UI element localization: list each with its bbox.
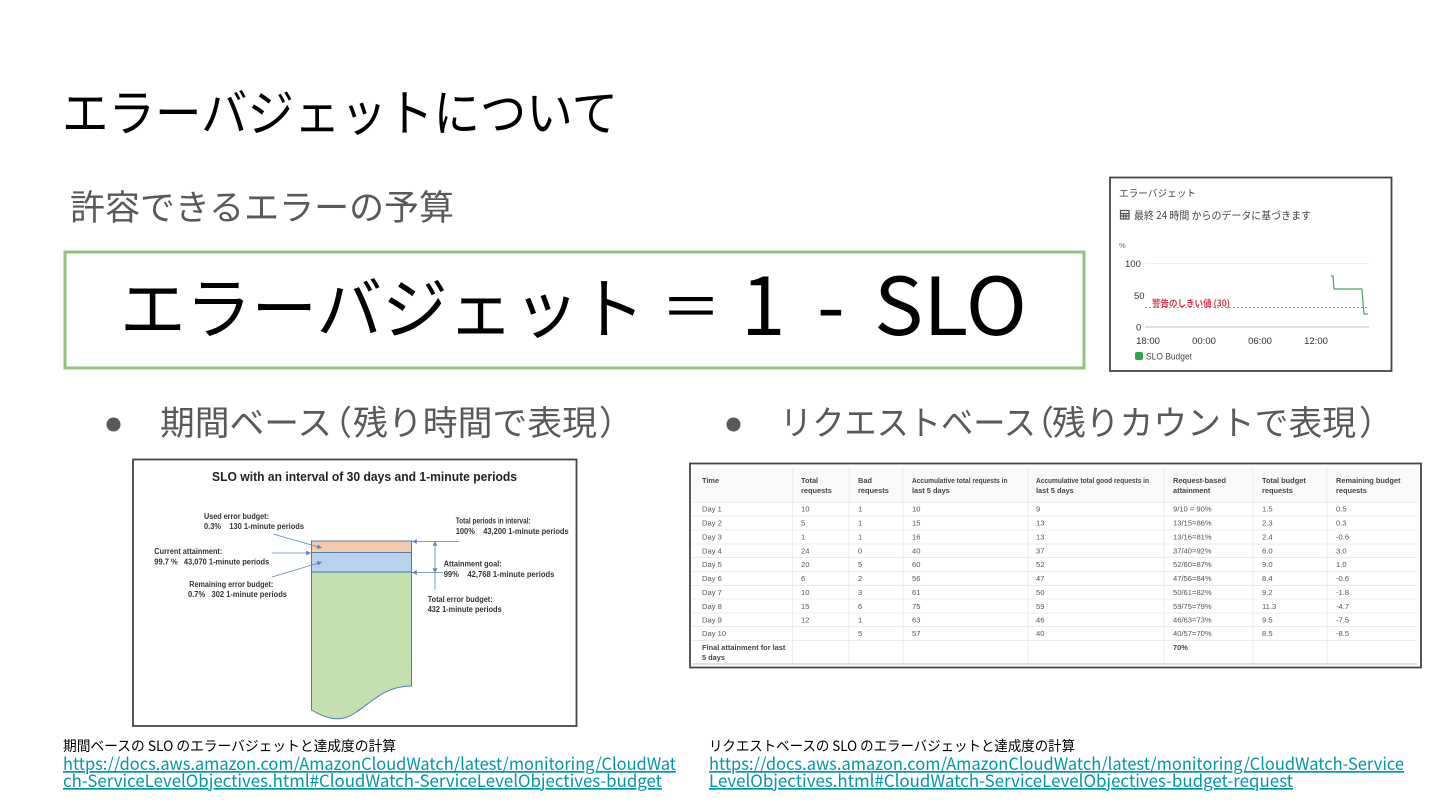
table rows: -0.6 <box>1336 574 1349 583</box>
table rows: Day 7 <box>702 588 722 597</box>
table rows: 75 <box>912 602 920 611</box>
diagram title: SLO with an interval of 30 days and 1-minute periods <box>212 470 517 484</box>
table rows: Day 6 <box>702 574 722 583</box>
table rows: -0.6 <box>1336 532 1349 542</box>
table rows: 10 <box>801 588 809 597</box>
table rows: 9.2 <box>1262 588 1273 597</box>
label: total error budget: 432 1-minute periods <box>428 605 502 614</box>
bullet heading: period based <box>106 396 633 445</box>
label: total error budget <box>428 595 502 614</box>
label: used error budget: 0.3% 130 1-minute periods <box>204 522 305 531</box>
table rows: 37/40=92% <box>1173 546 1212 556</box>
table rows: 15 <box>801 602 809 611</box>
table header: requests <box>858 486 889 495</box>
bullet heading: period based: 期間ベース <box>160 396 332 445</box>
table rows: 1 <box>801 532 805 542</box>
link: request based <box>709 750 1404 792</box>
panel: SLO period diagram <box>133 460 576 726</box>
final attainment row: Final attainment for last <box>702 643 786 652</box>
table rows: 1 <box>858 616 862 624</box>
table header: Total <box>801 476 818 485</box>
table rows: 1 <box>858 518 862 528</box>
final attainment row: 70% <box>1173 643 1188 652</box>
table rows: 16 <box>912 532 920 542</box>
bullet heading: request based <box>726 396 1393 445</box>
table rows: 1 <box>858 532 862 542</box>
table rows: 13/16=81% <box>1173 532 1212 542</box>
table rows: 61 <box>912 588 920 597</box>
table rows: 60 <box>912 560 920 569</box>
formula box: 1 <box>741 243 785 359</box>
table rows: 1.5 <box>1262 504 1273 514</box>
table rows: Day 5 <box>702 560 722 569</box>
table rows: 50/61=82% <box>1173 588 1212 597</box>
y axis: 50 <box>1134 291 1145 302</box>
table rows <box>702 504 1349 638</box>
table rows: Day 8 <box>702 602 722 611</box>
table rows: Day 2 <box>702 518 722 528</box>
legend: SLO Budget <box>1146 352 1193 362</box>
table rows: 0.5 <box>1336 504 1347 514</box>
table header: attainment <box>1173 486 1211 495</box>
table rows: 15 <box>912 518 920 528</box>
chart panel: error budget <box>1110 178 1392 371</box>
bar: attained <box>312 572 412 719</box>
link: period based <box>63 750 677 792</box>
table rows: 0.3 <box>1336 518 1347 528</box>
table rows: 2.4 <box>1262 532 1273 542</box>
y axis: % <box>1119 241 1126 250</box>
label: used error budget: Used error budget: <box>204 512 269 521</box>
table rows: Day 3 <box>702 532 722 542</box>
table rows: 40 <box>1036 629 1044 638</box>
label: used error budget <box>204 512 305 531</box>
label: total periods: Total periods in interval: <box>456 517 531 526</box>
y axis: 0 <box>1136 322 1141 334</box>
x axis: 18:00 <box>1136 336 1160 347</box>
label: remaining error budget <box>188 580 288 599</box>
table rows: 5 <box>801 518 805 528</box>
table rows: 47 <box>1036 574 1044 583</box>
table rows: 2 <box>858 574 862 583</box>
label: current attainment: 99.7 % 43,070 1-minute periods <box>154 557 270 566</box>
table rows: Day 4 <box>702 546 722 556</box>
table rows: 52 <box>1036 560 1044 569</box>
table rows: 3 <box>858 588 862 597</box>
table header: last 5 days <box>1036 486 1074 495</box>
table rows: 57 <box>912 629 920 638</box>
label: remaining error budget: 0.7% 302 1-minute periods <box>188 590 288 599</box>
grid lines <box>692 468 1417 664</box>
label: attainment goal: 99% 42,768 1-minute periods <box>444 570 555 579</box>
table rows: 3.0 <box>1336 546 1347 556</box>
table rows: 2.3 <box>1262 518 1273 528</box>
table rows: 46/63=73% <box>1173 616 1212 624</box>
chart title: エラーバジェット <box>1119 185 1196 200</box>
caption: period based: 期間ベースの SLO のエラーバジェットと達成度の計算 <box>63 736 396 756</box>
table rows: 52/60=87% <box>1173 560 1212 569</box>
bullet heading: period based: 残り時間で表現 <box>353 396 597 445</box>
table rows: 9/10 = 90% <box>1173 504 1212 514</box>
table header: requests <box>1262 486 1293 495</box>
label: attainment goal <box>444 560 555 579</box>
table header: requests <box>801 486 832 495</box>
table rows: 1 <box>858 504 862 514</box>
link: period based: ch-ServiceLevelObjectives.html#CloudWatch-ServiceLevelObjectives-budget <box>63 767 663 792</box>
table header: requests <box>1336 486 1367 495</box>
threshold line: 警告のしきい値 (30) <box>1152 296 1230 310</box>
table header: Request-based <box>1173 476 1226 485</box>
label: total error budget: Total error budget: <box>428 595 493 604</box>
table rows: 37 <box>1036 546 1044 556</box>
SLO budget line <box>1331 276 1368 314</box>
table rows: 24 <box>801 546 809 556</box>
table header: Time <box>702 476 719 485</box>
table rows: 12 <box>801 616 809 624</box>
label: attainment goal: Attainment goal: <box>444 560 502 569</box>
y axis: 100 <box>1125 259 1141 270</box>
icon: calendar <box>1120 210 1129 219</box>
final attainment row <box>702 643 1188 662</box>
link: request based: LevelObjectives.html#CloudWatch-ServiceLevelObjectives-budget-request <box>709 767 1294 792</box>
table rows: 40/57=70% <box>1173 629 1212 638</box>
table header: Total budget <box>1262 476 1306 485</box>
table rows: 40 <box>912 546 920 556</box>
table header: Remaining budget <box>1336 476 1401 485</box>
y axis <box>1119 241 1145 334</box>
table rows: 5 <box>858 629 862 638</box>
table rows: 50 <box>1036 588 1044 597</box>
table rows: 56 <box>912 574 920 583</box>
formula box: エラーバジェット <box>120 256 645 353</box>
bullet heading: request based: 残りカウントで表現 <box>1052 396 1356 445</box>
table header background <box>692 468 1417 502</box>
table rows: 20 <box>801 560 809 569</box>
table rows: 47/56=84% <box>1173 574 1212 583</box>
table rows: 6 <box>858 602 862 611</box>
table rows: -8.5 <box>1336 629 1349 638</box>
table rows: 8.4 <box>1262 574 1273 583</box>
table rows: 8.5 <box>1262 629 1273 638</box>
panel: request based table <box>690 464 1421 668</box>
table rows: 10 <box>801 504 809 514</box>
table rows: 9 <box>1036 504 1040 514</box>
table rows: 9.0 <box>1262 560 1273 569</box>
table header: last 5 days <box>912 486 950 495</box>
table rows: 13/15=86% <box>1173 518 1212 528</box>
label: total periods: 100% 43,200 1-minute periods <box>456 527 569 536</box>
table rows: 0 <box>858 546 862 556</box>
table rows: 6.0 <box>1262 546 1273 556</box>
caption: request based: リクエストベースの SLO のエラーバジェットと達成度の計算 <box>709 736 1075 756</box>
bar: used budget <box>312 541 412 552</box>
x axis: 12:00 <box>1304 336 1328 347</box>
table rows: 5 <box>858 560 862 569</box>
label: current attainment: Current attainment: <box>154 547 222 556</box>
label: total periods <box>456 517 569 536</box>
bullet heading: period based: （ <box>318 396 352 445</box>
table rows: 63 <box>912 616 920 624</box>
title: エラーバジェットについて <box>62 74 618 146</box>
table header: Accumulative total requests in <box>912 476 1008 485</box>
label: current attainment <box>154 547 270 566</box>
bullet heading: request based: ） <box>1359 396 1393 445</box>
table rows: 11.3 <box>1262 602 1276 611</box>
table rows: 6 <box>801 574 805 583</box>
bullet heading: request based: リクエストベース <box>780 396 1036 445</box>
table header: Accumulative total good requests in <box>1036 476 1149 485</box>
table header <box>702 476 1401 495</box>
table rows: 10 <box>912 504 920 514</box>
table rows: -4.7 <box>1336 602 1349 611</box>
x axis: 00:00 <box>1192 336 1216 347</box>
table rows: 46 <box>1036 616 1044 624</box>
caption: period based <box>63 736 677 792</box>
table rows: 1.0 <box>1336 560 1347 569</box>
label: remaining error budget: Remaining error budget: <box>189 580 273 589</box>
caption: request based <box>709 736 1404 792</box>
table rows: 59/75=79% <box>1173 602 1212 611</box>
x axis: 06:00 <box>1248 336 1272 347</box>
table rows: -1.8 <box>1336 588 1349 597</box>
formula box <box>65 243 1084 368</box>
table rows: Day 10 <box>702 629 726 638</box>
table rows: 9.5 <box>1262 616 1273 624</box>
bullet heading: request based: （ <box>1020 396 1054 445</box>
table rows: -7.5 <box>1336 616 1349 624</box>
table rows: Day 9 <box>702 616 722 624</box>
formula box: ＝ <box>661 260 721 347</box>
table rows: 13 <box>1036 532 1044 542</box>
bullet heading: period based: ） <box>599 396 633 445</box>
bar: remaining budget <box>312 552 412 572</box>
x axis <box>1136 336 1328 347</box>
table rows: Day 1 <box>702 504 722 514</box>
link: request based: https://docs.aws.amazon.com/AmazonCloudWatch/latest/monitoring/CloudWatch-Service <box>709 750 1404 775</box>
arrows <box>272 534 459 590</box>
formula box: - <box>817 243 845 359</box>
subtitle: 許容できるエラーの予算 <box>70 180 454 231</box>
table header: Bad <box>858 476 872 485</box>
link: period based: https://docs.aws.amazon.com/AmazonCloudWatch/latest/monitoring/CloudWat <box>63 750 677 775</box>
formula box: SLO <box>874 243 1027 359</box>
table rows: 59 <box>1036 602 1044 611</box>
final attainment row: 5 days <box>702 653 725 662</box>
table rows: 13 <box>1036 518 1044 528</box>
chart subtitle: 最終 24 時間 からのデータに基づきます <box>1134 208 1311 223</box>
